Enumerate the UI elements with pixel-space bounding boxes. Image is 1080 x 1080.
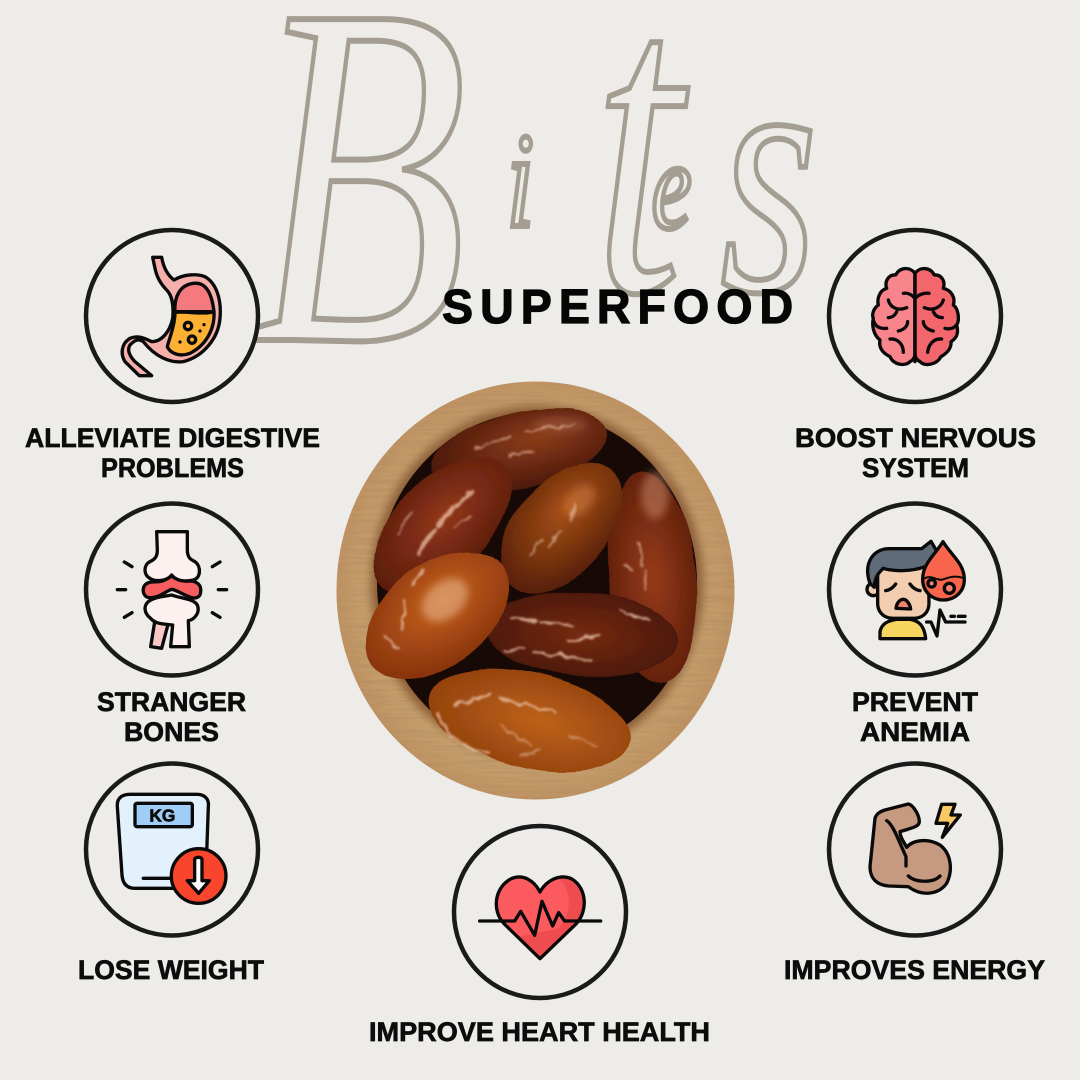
label: nervous bbox=[795, 423, 1036, 483]
panel: energy bbox=[784, 764, 1045, 985]
icon: brain bbox=[873, 269, 958, 364]
icon: weighing scale bbox=[117, 794, 226, 903]
label: digestive bbox=[25, 423, 320, 483]
panel: weight bbox=[78, 764, 264, 985]
panel: nervous bbox=[795, 230, 1036, 483]
ring: weight bbox=[86, 764, 258, 936]
label: bones bbox=[97, 687, 246, 747]
ring: digestive bbox=[86, 230, 258, 402]
panel: bones bbox=[86, 504, 258, 747]
panel: heart health bbox=[369, 826, 710, 1047]
ring: energy bbox=[829, 764, 1001, 936]
label: bones: BONES bbox=[124, 717, 219, 747]
title: Bites: i bbox=[507, 107, 534, 256]
icon: tired person and blood drop bbox=[867, 541, 965, 639]
label: anemia bbox=[852, 687, 978, 747]
panel: digestive bbox=[25, 230, 320, 483]
photo: bowl of dates bbox=[330, 375, 740, 805]
label: weight: LOSE WEIGHT bbox=[78, 955, 264, 985]
label: anemia: ANEMIA bbox=[860, 717, 970, 747]
ring: nervous bbox=[829, 230, 1001, 402]
icon: knee joint bbox=[117, 532, 227, 648]
label: anemia: PREVENT bbox=[852, 687, 978, 717]
icon: flexed arm with lightning bbox=[870, 804, 960, 893]
label: digestive: ALLEVIATE DIGESTIVE bbox=[25, 423, 320, 453]
label: nervous: SYSTEM bbox=[862, 453, 969, 483]
ring: anemia bbox=[829, 504, 1001, 676]
label: energy: IMPROVES ENERGY bbox=[784, 955, 1045, 985]
label: nervous: BOOST NERVOUS bbox=[795, 423, 1036, 453]
icon: heart with pulse bbox=[480, 877, 601, 959]
heading: superfood: SUPERFOOD bbox=[442, 280, 793, 334]
icon: weighing scale: KG bbox=[149, 805, 175, 825]
ring: heart bbox=[454, 826, 626, 998]
label: bones: STRANGER bbox=[97, 687, 246, 717]
icon: stomach bbox=[122, 257, 220, 376]
ring: bones bbox=[86, 504, 258, 676]
panel: anemia bbox=[829, 504, 1001, 747]
title: Bites: e bbox=[652, 117, 692, 256]
label: heart health: IMPROVE HEART HEALTH bbox=[369, 1017, 710, 1047]
label: digestive: PROBLEMS bbox=[101, 453, 244, 483]
